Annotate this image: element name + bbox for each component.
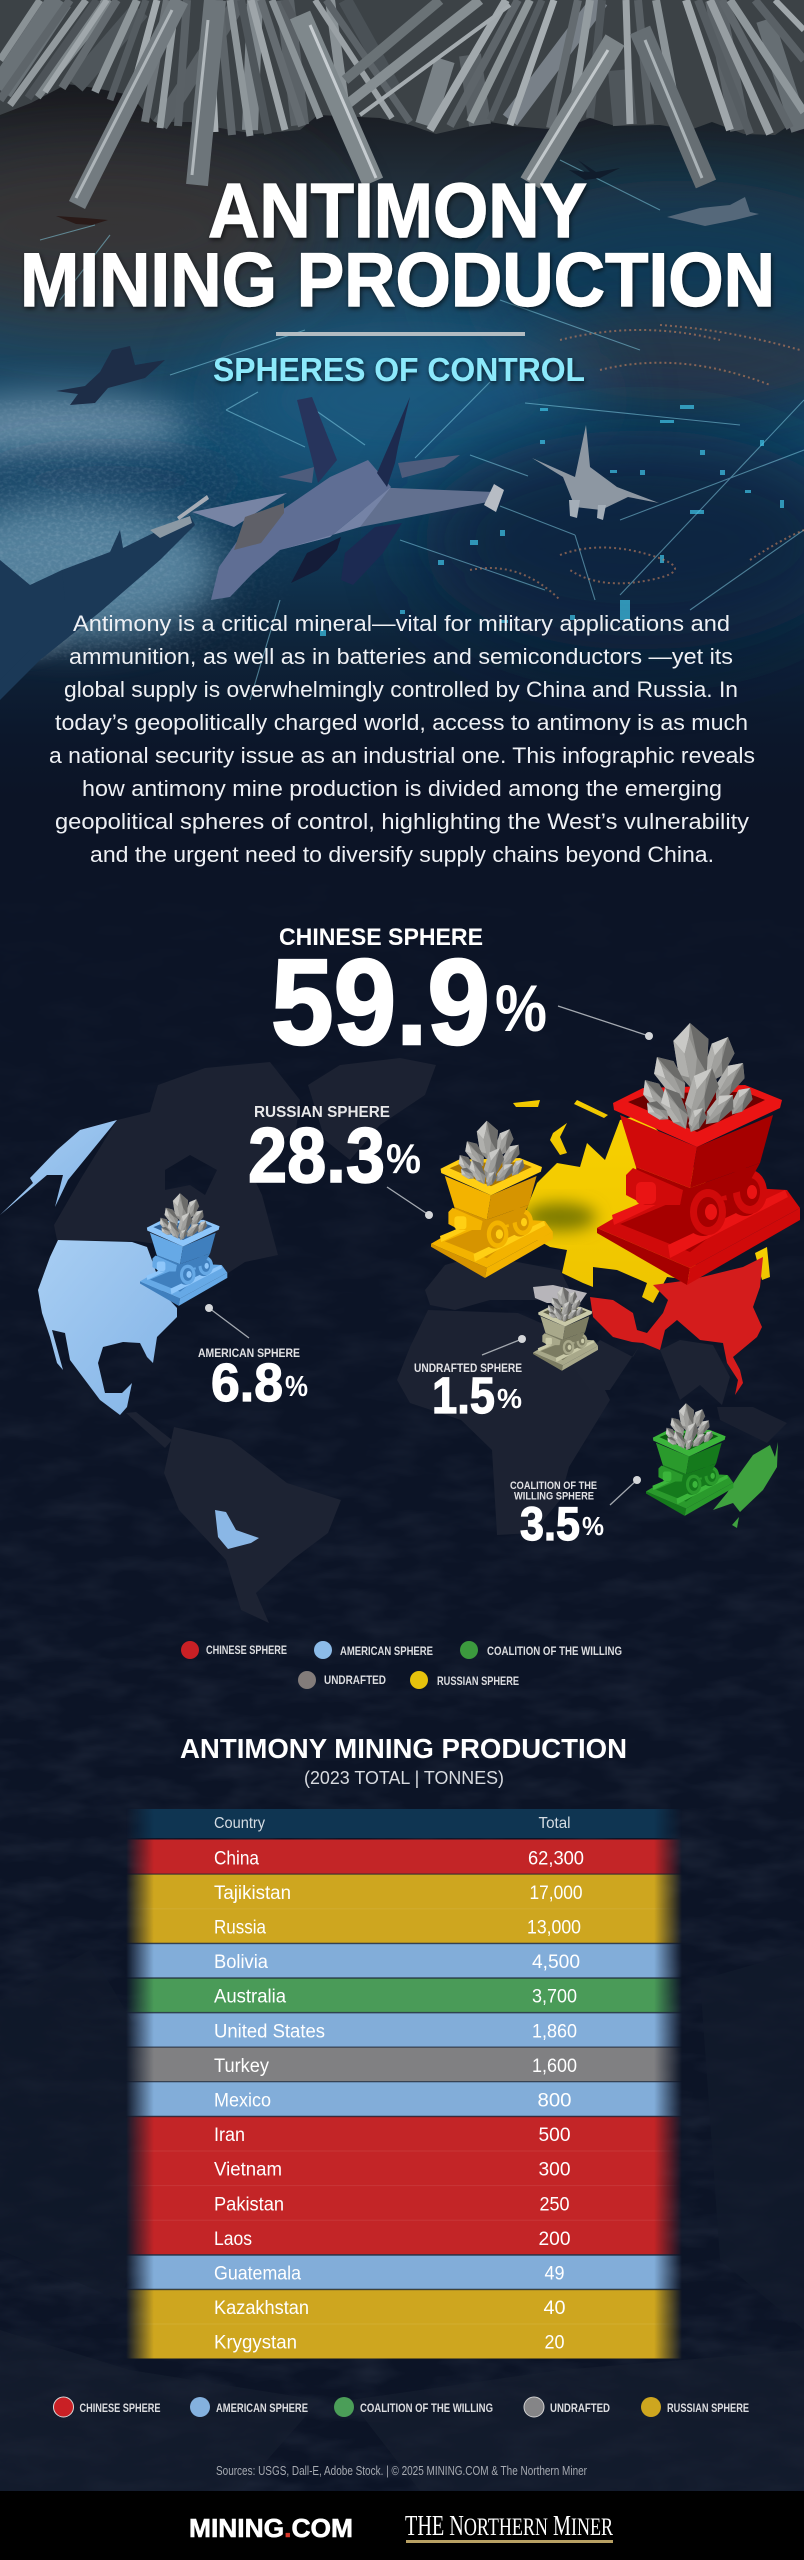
country names: Australia — [214, 1987, 286, 2008]
callout: Undrafted sphere — [414, 1335, 526, 1424]
country names: Russia — [214, 1918, 266, 1938]
title divider — [276, 332, 525, 336]
callout: Chinese sphere: 59.9 — [271, 934, 490, 1070]
icon: Coalition of the Willing mine cart — [646, 1403, 733, 1516]
table header — [214, 1815, 570, 1832]
cart shadow on Russia — [524, 1203, 596, 1231]
cockpit — [234, 503, 284, 550]
callout: Undrafted sphere: UNDRAFTED SPHERE — [414, 1362, 522, 1375]
callout: Coalition of the Willing sphere: COALITION OF THE — [510, 1480, 597, 1492]
intro paragraph: and the urgent need to diversify supply chains beyond China. — [90, 842, 714, 867]
production totals: 40 — [544, 2298, 566, 2319]
teal data points — [320, 405, 784, 636]
production totals: 3,700 — [532, 1987, 577, 2008]
callout: Chinese sphere — [271, 924, 653, 1070]
production totals: 49 — [544, 2264, 564, 2284]
bottom legend: COALITION OF THE WILLING — [360, 2401, 493, 2415]
country names: Kazakhstan — [214, 2298, 309, 2319]
production totals: 300 — [538, 2160, 570, 2181]
production totals: 250 — [540, 2194, 570, 2215]
region: Australia — [713, 1442, 778, 1512]
country names: United States — [214, 2021, 325, 2042]
map legend: RUSSIAN SPHERE — [437, 1674, 519, 1688]
landmass: Central America — [126, 1412, 172, 1448]
table heading: ANTIMONY MINING PRODUCTION — [180, 1733, 627, 1764]
landmass: Europe — [425, 1255, 570, 1310]
country names: Vietnam — [214, 2160, 282, 2181]
icon: American sphere mine cart — [140, 1193, 227, 1306]
hero illustration: sky, sea and network — [0, 140, 804, 700]
region: Bolivia — [215, 1510, 259, 1549]
production totals: 1,860 — [532, 2021, 577, 2042]
helicopter — [56, 216, 108, 225]
fuselage — [211, 460, 391, 600]
callout: Coalition of the Willing sphere: WILLING SPHERE — [514, 1490, 594, 1502]
long tip shards — [77, 0, 180, 205]
intro paragraph: ammunition, as well as in batteries and semiconductors —yet its — [69, 644, 733, 669]
callout: Coalition of the Willing sphere: % — [582, 1511, 604, 1541]
callout: Undrafted sphere: 1.5 — [432, 1367, 495, 1424]
intro paragraph: today’s geopolitically charged world, access to antimony is as much — [55, 710, 748, 735]
country names: Pakistan — [214, 2194, 284, 2215]
jet: left dark — [56, 346, 165, 405]
narrow shards, left cluster — [0, 0, 40, 60]
callout: American sphere: % — [285, 1371, 308, 1403]
rear stabilizers — [398, 455, 460, 478]
callout: American sphere: AMERICAN SPHERE — [198, 1347, 300, 1360]
production totals: 20 — [544, 2333, 564, 2354]
network lines — [40, 160, 804, 700]
intro paragraph: global supply is overwhelmingly controlled by China and Russia. In — [64, 677, 738, 702]
map legend — [181, 1641, 622, 1689]
intro paragraph — [49, 611, 755, 867]
production totals: 800 — [538, 2090, 572, 2112]
region: Alaska — [0, 1120, 117, 1215]
thick base shards — [0, 0, 60, 90]
world map — [0, 1058, 787, 1623]
antimony crystals along the top — [0, 0, 804, 205]
intro paragraph: how antimony mine production is divided among the emerging — [82, 776, 722, 801]
callout: Chinese sphere: % — [495, 971, 547, 1045]
landmass: South America — [164, 1427, 341, 1623]
callout: Chinese sphere: CHINESE SPHERE — [279, 924, 483, 951]
engines — [341, 523, 402, 585]
callout: Undrafted sphere: % — [497, 1383, 522, 1414]
intro paragraph: Antimony is a critical mineral—vital for military applications and — [73, 611, 730, 636]
production totals: 4,500 — [532, 1952, 580, 1973]
country names: Turkey — [214, 2056, 269, 2077]
jet: right grey — [532, 425, 659, 510]
country names: Bolivia — [214, 1952, 268, 1973]
tail fins — [297, 397, 337, 483]
bottom legend — [54, 2397, 749, 2417]
country names: Tajikistan — [214, 1883, 291, 1904]
icon: Russian sphere mine cart — [431, 1120, 553, 1278]
intro paragraph: a national security issue as an industrial one. This infographic reveals — [49, 743, 755, 768]
jet: upper right small — [569, 160, 620, 180]
landmass: Canada and Arctic — [54, 1062, 300, 1275]
landmass: Middle East — [573, 1340, 640, 1390]
icon: Undrafted sphere mine cart — [533, 1287, 598, 1371]
table subheading: (2023 TOTAL | TONNES) — [304, 1768, 504, 1788]
subtitle: SPHERES OF CONTROL — [213, 351, 585, 388]
right wing — [360, 487, 498, 527]
bottom legend: AMERICAN SPHERE — [216, 2401, 308, 2415]
sources: Sources: USGS, Dall-E, Adobe Stock. | © 2025 MINING.COM & The Northern Miner — [216, 2464, 587, 2478]
landmass: Greenland — [308, 1058, 436, 1160]
country names: Laos — [214, 2229, 252, 2250]
table header: Total — [538, 1815, 570, 1832]
title — [20, 168, 775, 323]
country names: Iran — [214, 2125, 245, 2146]
country names — [214, 1848, 325, 2354]
icon: Chinese sphere mine cart — [597, 1022, 800, 1285]
landmass: India — [660, 1340, 730, 1405]
region: United States and Mexico — [38, 1240, 177, 1415]
icon: main fighter jet — [177, 397, 504, 600]
callout: American sphere: 6.8 — [211, 1353, 283, 1413]
callout: Russian sphere — [248, 1104, 433, 1219]
production table — [126, 1809, 682, 2358]
callout: Russian sphere: 28.3 — [248, 1111, 385, 1199]
production totals: 62,300 — [528, 1848, 584, 1869]
bottom legend: RUSSIAN SPHERE — [667, 2401, 749, 2415]
logo: MINING.COM: MINING.COM — [189, 2513, 353, 2543]
landmass: Africa — [397, 1310, 610, 1535]
narrow shards, right cluster — [430, 0, 506, 130]
jet: upper right grey — [667, 197, 759, 226]
map legend: CHINESE SPHERE — [206, 1643, 287, 1657]
callout: Coalition of the Willing sphere: 3.5 — [520, 1497, 580, 1550]
production totals: 13,000 — [527, 1918, 581, 1938]
production totals: 1,600 — [532, 2056, 577, 2077]
callout: Russian sphere: RUSSIAN SPHERE — [254, 1104, 390, 1121]
landmass: Turkey undrafted — [533, 1285, 587, 1303]
callout: Russian sphere: % — [386, 1135, 421, 1182]
table header: Country — [214, 1815, 265, 1832]
title: MINING PRODUCTION — [20, 238, 775, 323]
region: Russian sphere — [513, 1100, 770, 1303]
region: Chinese sphere — [590, 1257, 763, 1395]
country names: Guatemala — [214, 2264, 301, 2284]
footer bar — [0, 2491, 804, 2560]
logo: The Northern Miner: THE NORTHERN MINER — [405, 2511, 613, 2542]
icon: background fighter jets and ship — [0, 160, 759, 700]
bottom legend: CHINESE SPHERE — [80, 2401, 160, 2415]
crossing shards in the centre — [340, 0, 480, 110]
callout: Coalition of the Willing sphere — [510, 1476, 641, 1550]
country names: Krygystan — [214, 2333, 297, 2354]
left wing — [192, 493, 287, 527]
landmass: Southeast Asia — [717, 1407, 787, 1443]
production totals: 200 — [538, 2229, 570, 2250]
map legend: UNDRAFTED — [324, 1673, 386, 1687]
country names: Mexico — [214, 2090, 271, 2112]
bottom legend: UNDRAFTED — [550, 2401, 610, 2415]
country names: China — [214, 1848, 259, 1869]
map legend: AMERICAN SPHERE — [340, 1644, 433, 1658]
title: ANTIMONY — [208, 168, 587, 254]
intro paragraph: geopolitical spheres of control, highlighting the West’s vulnerability — [55, 809, 749, 834]
production totals — [527, 1848, 584, 2354]
callout: American sphere — [198, 1304, 308, 1413]
table colour bands — [126, 1809, 682, 2358]
city lights — [470, 325, 804, 600]
map legend: COALITION OF THE WILLING — [487, 1644, 622, 1658]
production totals: 500 — [538, 2125, 570, 2146]
production totals: 17,000 — [530, 1883, 582, 1904]
ship — [0, 515, 195, 700]
